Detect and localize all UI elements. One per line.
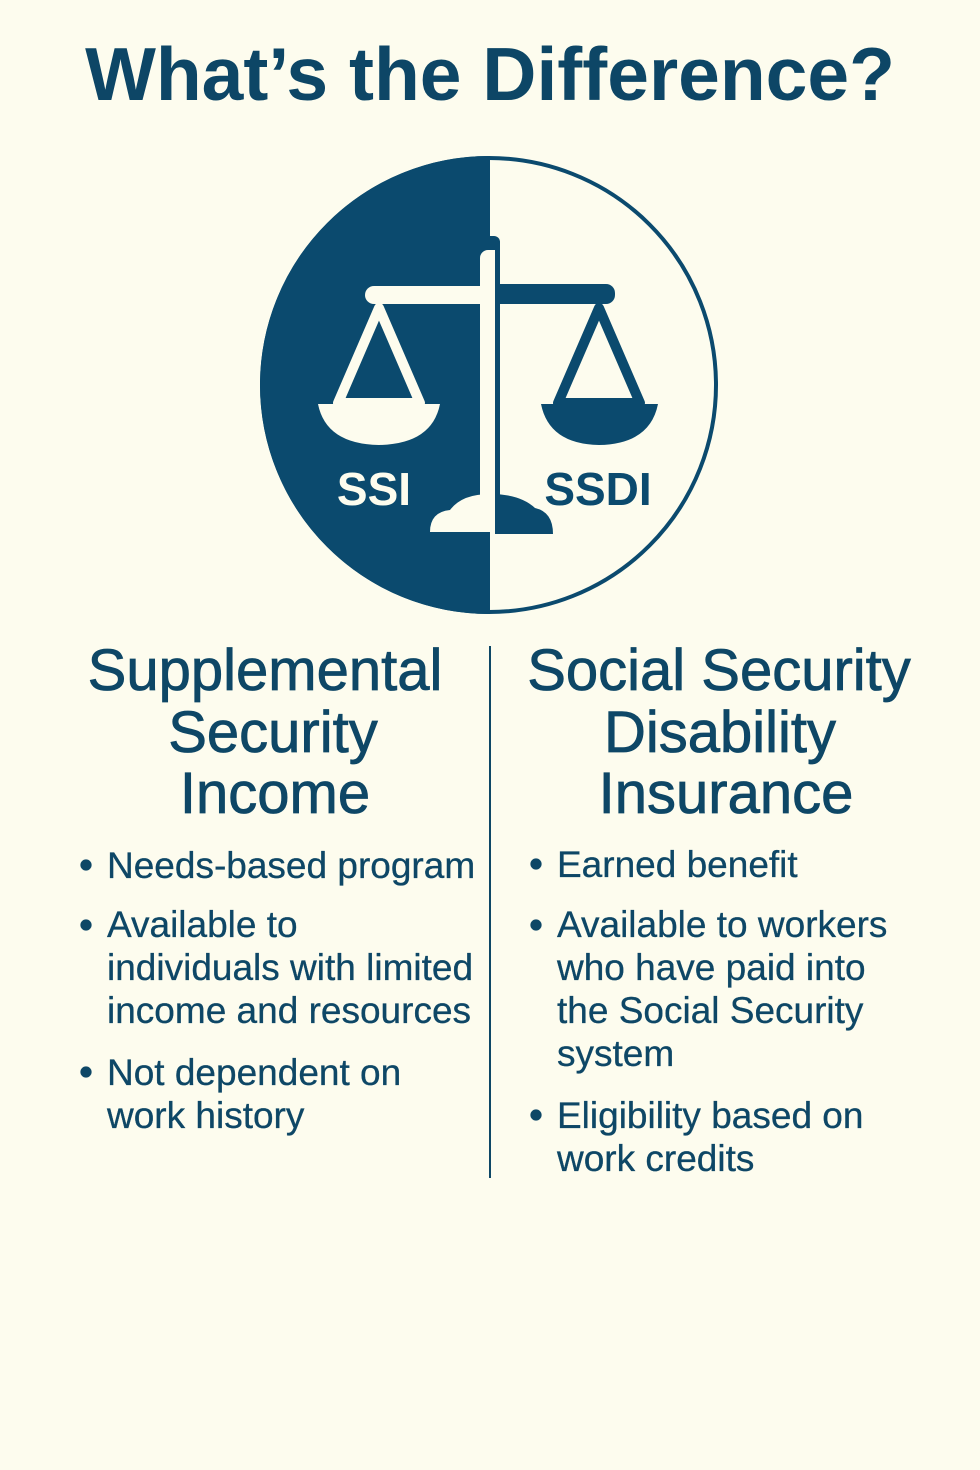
bullet list: SSDI: the Social Security bbox=[557, 990, 864, 1031]
label: SSI: SSI bbox=[337, 463, 411, 515]
bullet list: SSDI: system bbox=[557, 1033, 674, 1074]
bullet list: SSDI: Available to workers bbox=[557, 904, 887, 945]
bullet list: SSDI: Earned benefit bbox=[557, 844, 798, 885]
bullet list: SSI: work history bbox=[106, 1095, 305, 1136]
icon: scales of justice in split circle bbox=[260, 156, 718, 614]
bullet list: SSDI: who have paid into bbox=[556, 947, 866, 988]
heading: Supplemental Security Income: Security bbox=[168, 700, 378, 765]
label: SSDI: SSDI bbox=[544, 463, 652, 515]
bullet list: SSI: individuals with limited bbox=[107, 947, 473, 988]
bullet list: SSI: Available to bbox=[107, 904, 298, 945]
bullet list: SSDI: Eligibility based on bbox=[557, 1095, 863, 1136]
bullet list: SSI: Needs-based program bbox=[107, 845, 475, 886]
bullet list: SSI bbox=[80, 845, 475, 1136]
bullet list: SSI: Not dependent on bbox=[107, 1052, 401, 1093]
heading: Social Security Disability Insurance: Social Security bbox=[527, 638, 911, 703]
bullet list: SSDI bbox=[530, 844, 887, 1179]
heading: Supplemental Security Income: Supplemental bbox=[88, 638, 442, 703]
heading: Supplemental Security Income: Income bbox=[180, 761, 370, 826]
bullet list: SSI: income and resources bbox=[107, 990, 471, 1031]
heading: Supplemental Security Income bbox=[88, 638, 442, 826]
bullet list: SSDI: work credits bbox=[556, 1138, 754, 1179]
title: What’s the Difference? bbox=[85, 32, 895, 116]
heading: Social Security Disability Insurance bbox=[527, 638, 911, 826]
heading: Social Security Disability Insurance: Disability bbox=[604, 700, 836, 765]
divider bbox=[489, 646, 491, 1178]
heading: Social Security Disability Insurance: Insurance bbox=[599, 761, 853, 826]
